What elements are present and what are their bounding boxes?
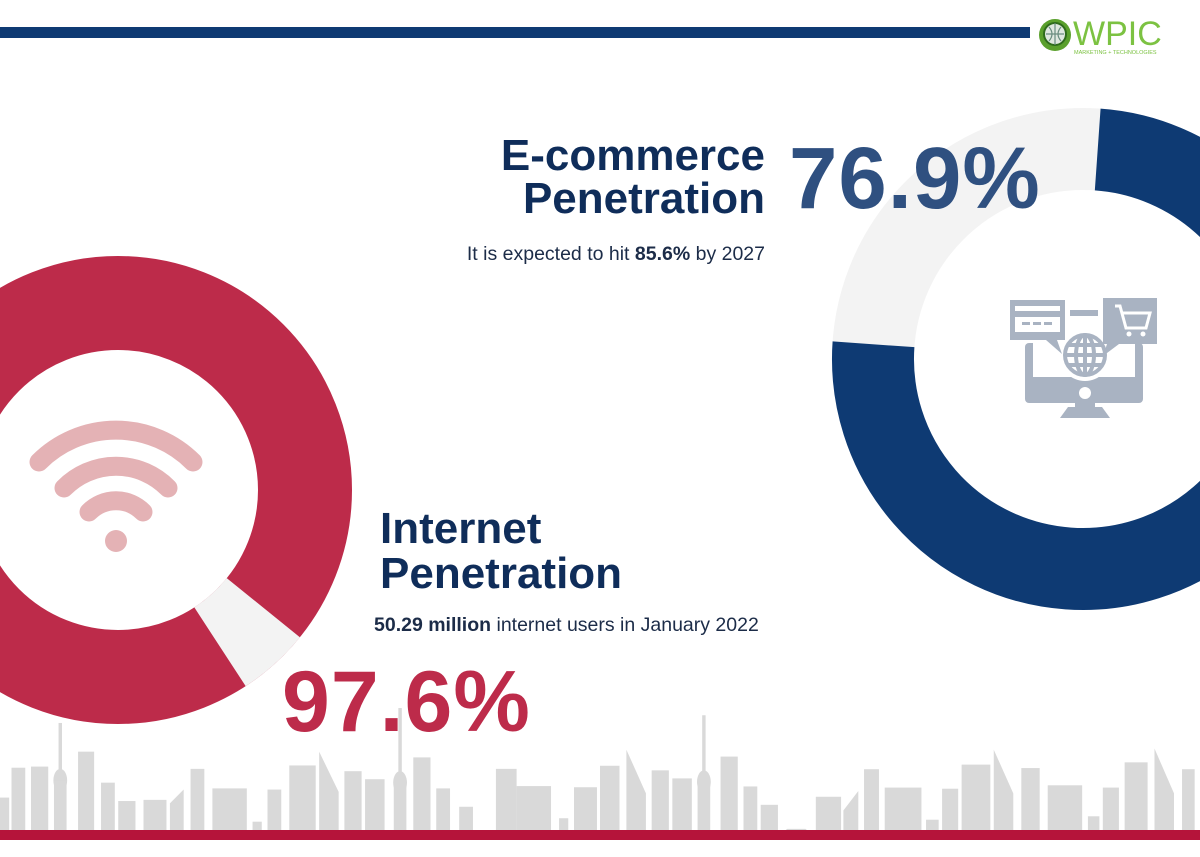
logo: WPIC [1073,15,1162,53]
heading: e-commerce penetration: Penetration [523,174,765,223]
icon: e-commerce monitor [1010,298,1157,418]
text: internet users: 50.29 million internet users in January 2022 [374,614,759,636]
top navy bar [0,27,1030,38]
heading: internet penetration [380,504,622,598]
skyline [0,708,1195,830]
heading: internet penetration: Penetration [380,549,622,598]
logo: MARKETING + TECHNOLOGIES [1074,50,1157,56]
icon: wifi [30,420,202,552]
heading: e-commerce penetration [501,131,765,223]
text: expected: It is expected to hit 85.6% by 2027 [467,243,765,265]
stat: 97.6%: 97.6% [282,654,531,750]
stat: 76.9%: 76.9% [789,130,1041,227]
heading: internet penetration: Internet [380,504,541,553]
bottom red bar [0,830,1200,840]
heading: e-commerce penetration: E-commerce [501,131,765,180]
logo [1039,15,1162,56]
